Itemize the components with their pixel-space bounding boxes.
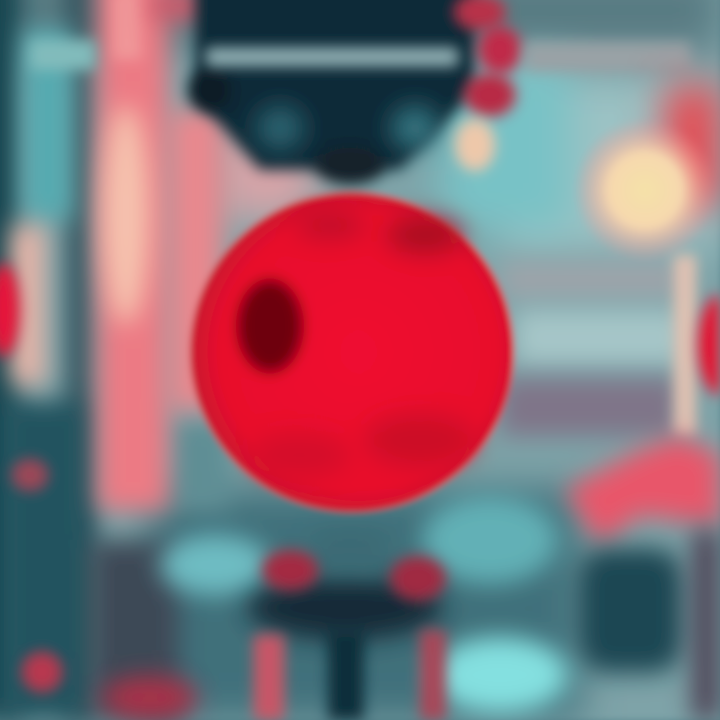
title bar [206,48,458,66]
bottom stand [247,528,446,720]
left-edge pale and red patch [0,225,198,720]
top-right band [525,42,690,72]
pink blob lower right [565,436,720,545]
top dark blob [188,0,475,185]
left dark column [0,0,180,720]
glowing light [573,85,720,262]
dark teal cylinder lower right [578,530,720,720]
big red sphere [190,192,514,512]
dark crater [238,280,302,372]
light cyan floor [160,496,568,713]
pink column [98,0,223,510]
red beaded arc [454,0,522,171]
right-edge red spot [674,255,720,435]
